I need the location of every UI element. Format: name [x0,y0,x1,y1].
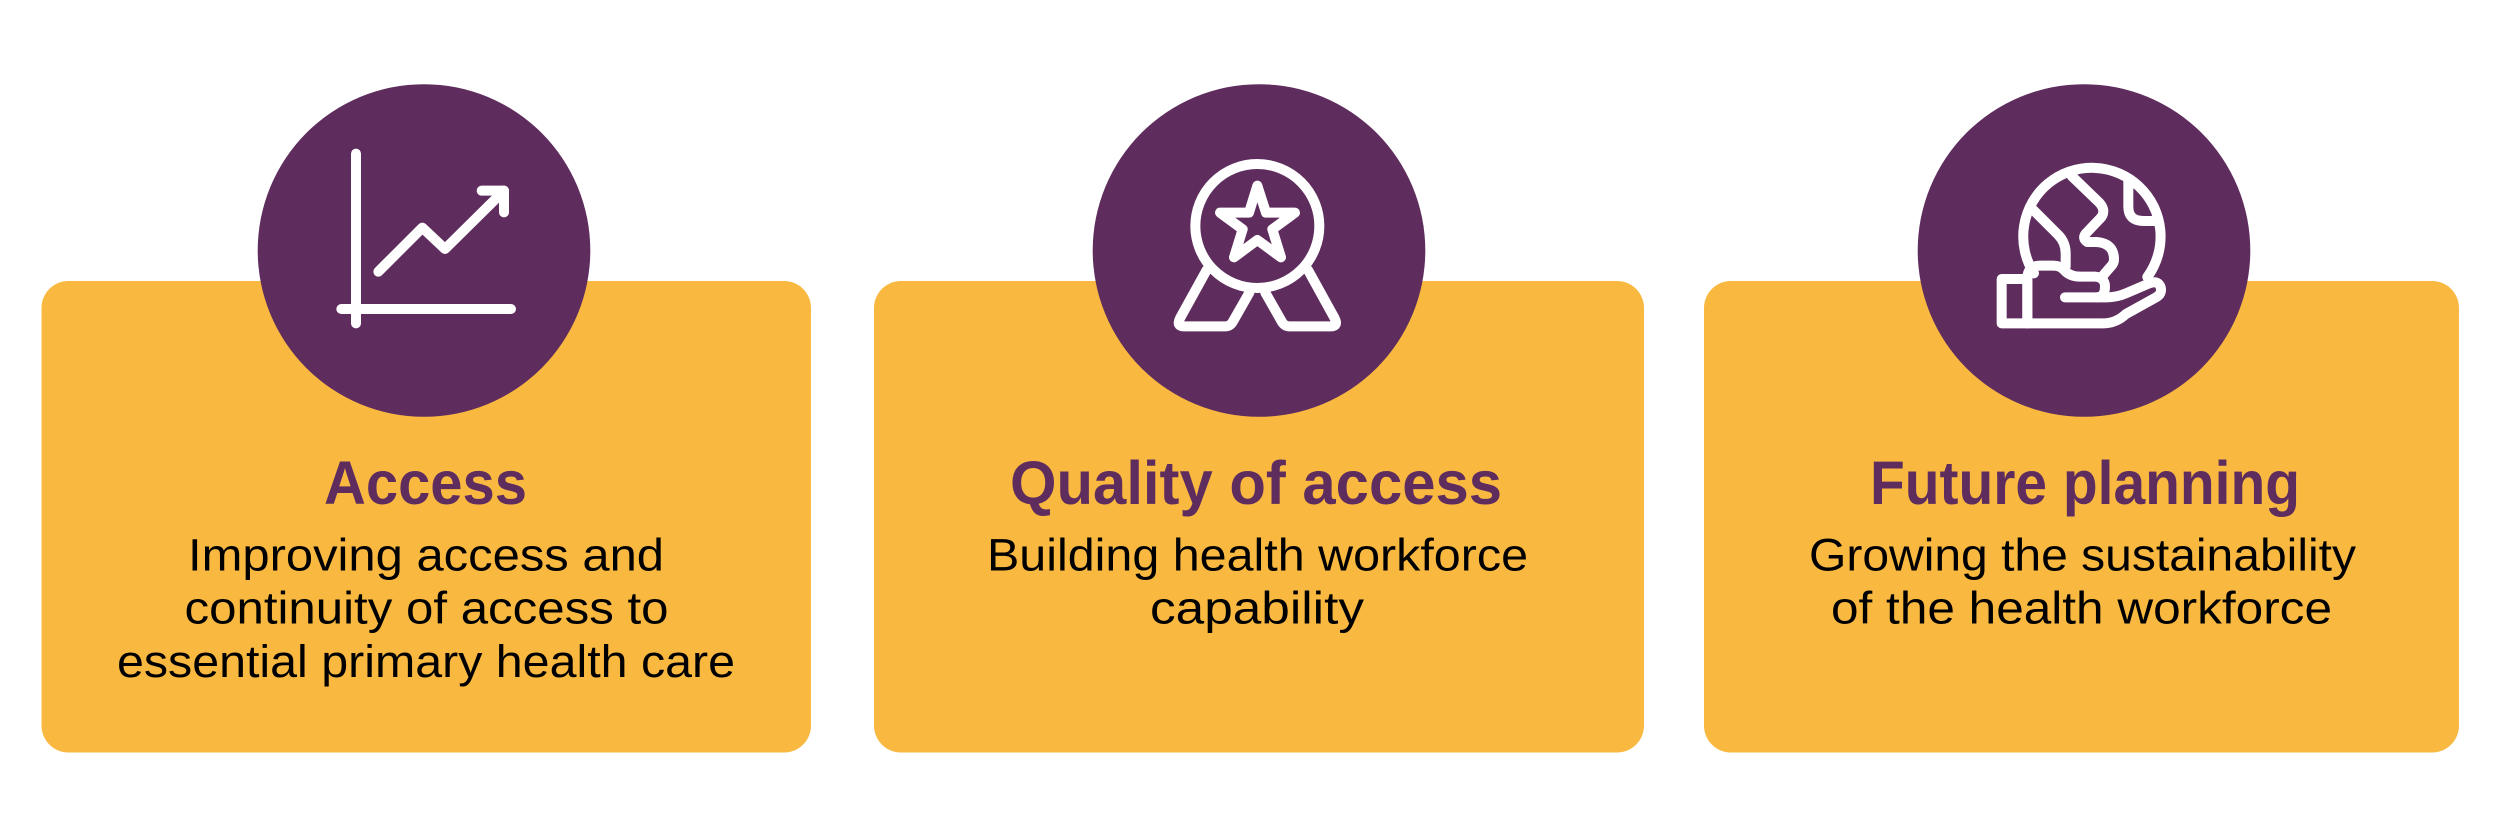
body text: Access: essential primary health care [117,636,735,687]
heading: Future planning: Future planning [1870,449,2300,517]
card background: Access [42,281,811,752]
body text: Quality of access: Building health workforce [987,530,1528,581]
icon circle: Future planning [1918,84,2250,417]
heading: Access: Access [324,449,527,517]
body text: Quality of access: capability [1150,583,1365,634]
panel: Future planning [1704,84,2459,752]
card background: Future planning [1704,281,2459,752]
icon: globe held in a hand [2002,168,2161,323]
body text: Future planning: of the health workforce [1831,583,2332,634]
body text: Quality of access [987,530,1528,634]
body text: Future planning [1809,530,2357,634]
body text: Future planning: Growing the sustainability [1809,530,2357,581]
body text: Access [117,530,735,687]
icon circle: Access [258,84,590,417]
icon: rising line chart [341,154,511,323]
card background: Quality of access [874,281,1644,752]
heading: Quality of access: Quality of access [1010,449,1502,517]
body text: Access: continuity of access to [184,583,668,634]
panel: Access [42,84,811,752]
body text: Access: Improving access and [188,530,664,581]
panel: Quality of access [874,84,1644,752]
icon: award rosette with star [1179,164,1336,326]
icon circle: Quality of access [1093,84,1425,417]
